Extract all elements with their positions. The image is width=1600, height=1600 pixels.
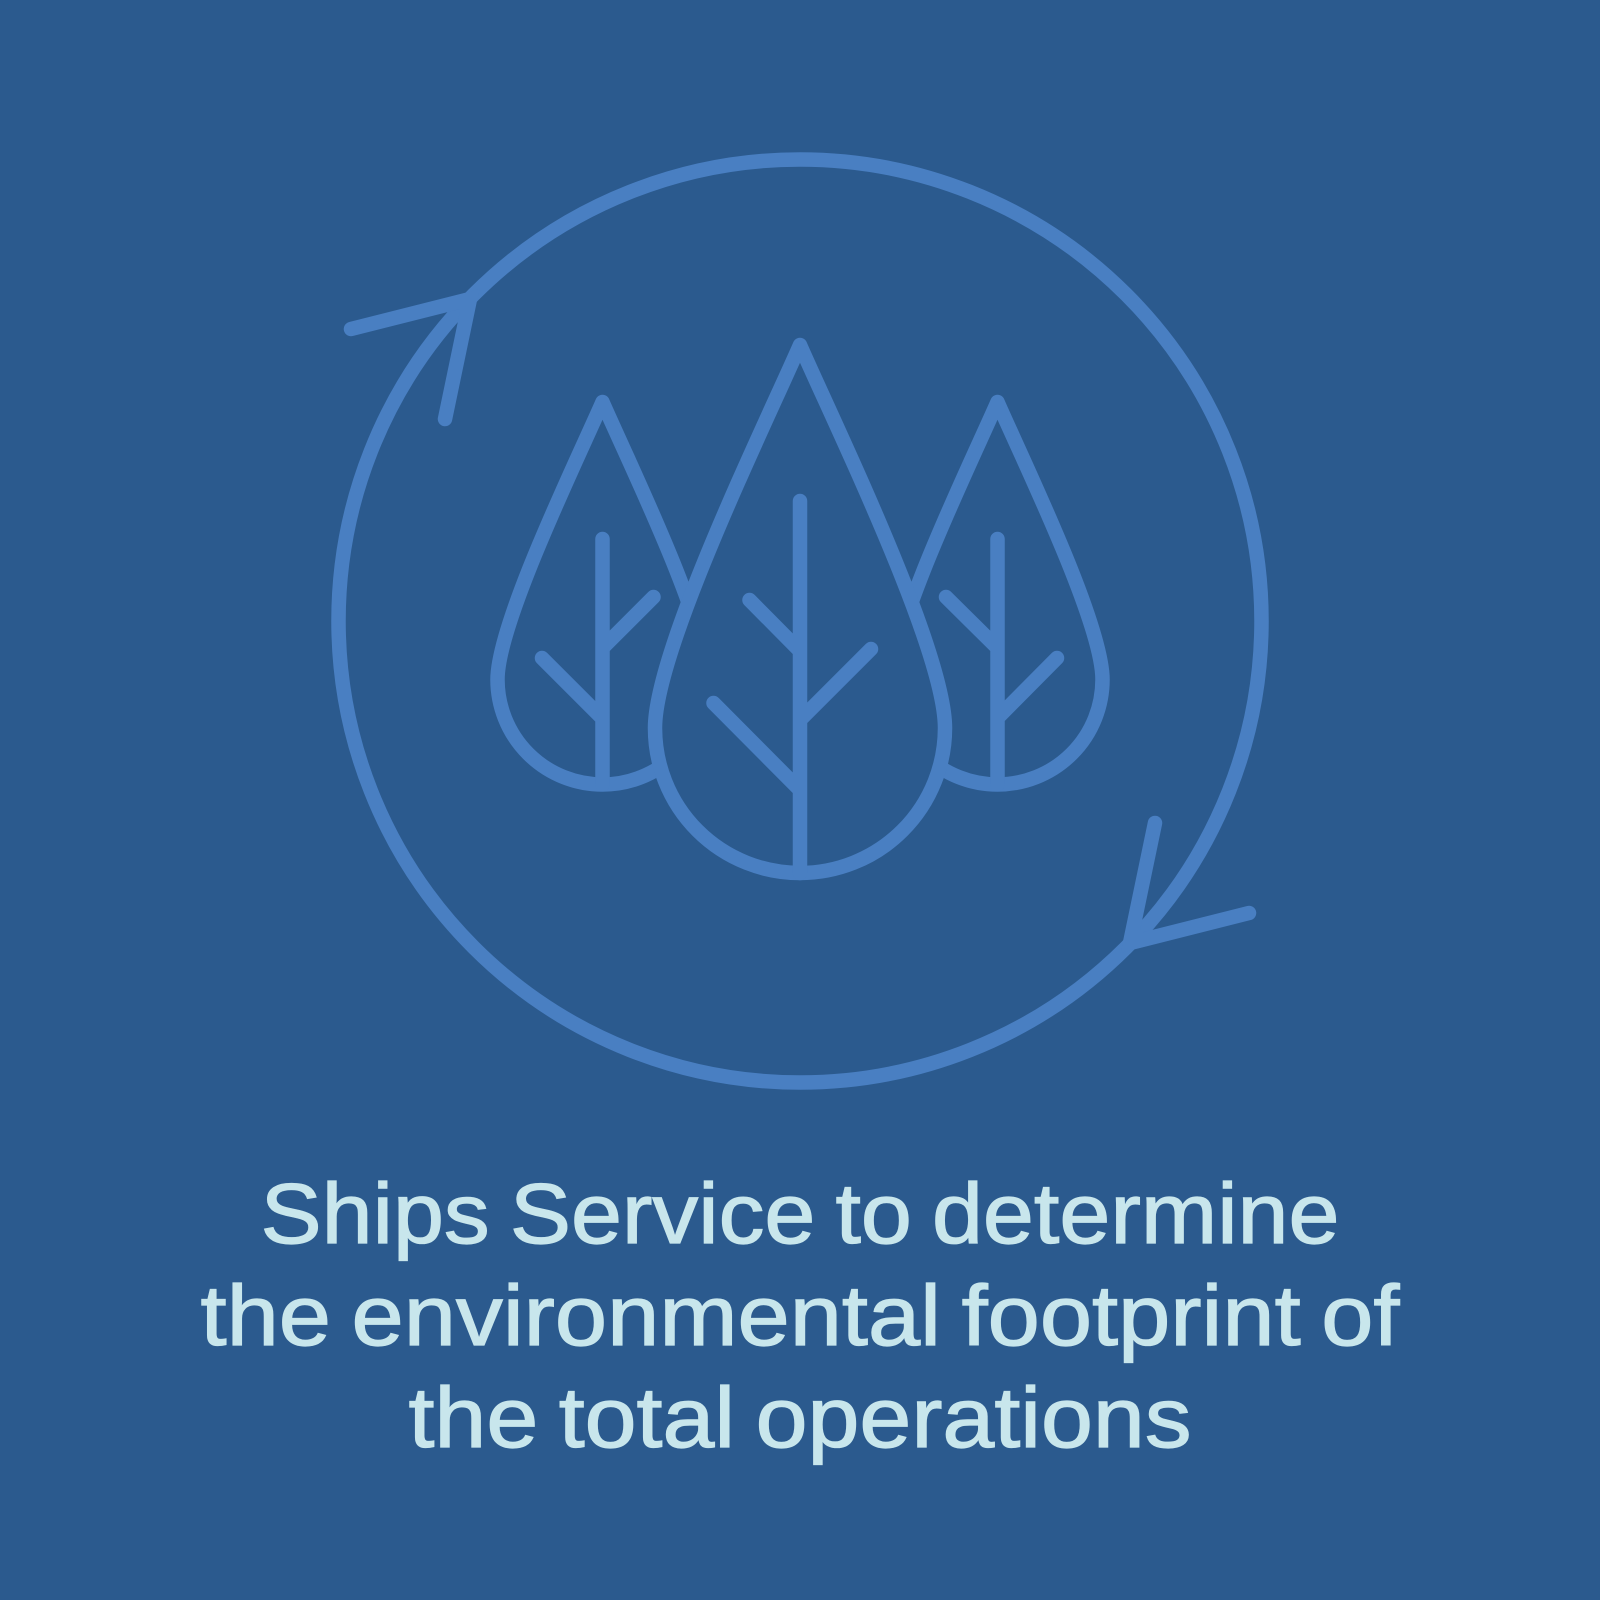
caption text <box>200 1167 1400 1466</box>
icon: right tree <box>892 402 1102 785</box>
icon: circular arrows cycle <box>338 160 1262 1082</box>
caption text: the total operations <box>408 1371 1192 1466</box>
caption text: Ships Service to determine <box>260 1167 1340 1262</box>
icon: left tree <box>498 402 708 785</box>
caption text: the environmental footprint of <box>200 1269 1400 1364</box>
icon: centre tree <box>655 345 945 873</box>
icon: three trees <box>498 345 1102 873</box>
